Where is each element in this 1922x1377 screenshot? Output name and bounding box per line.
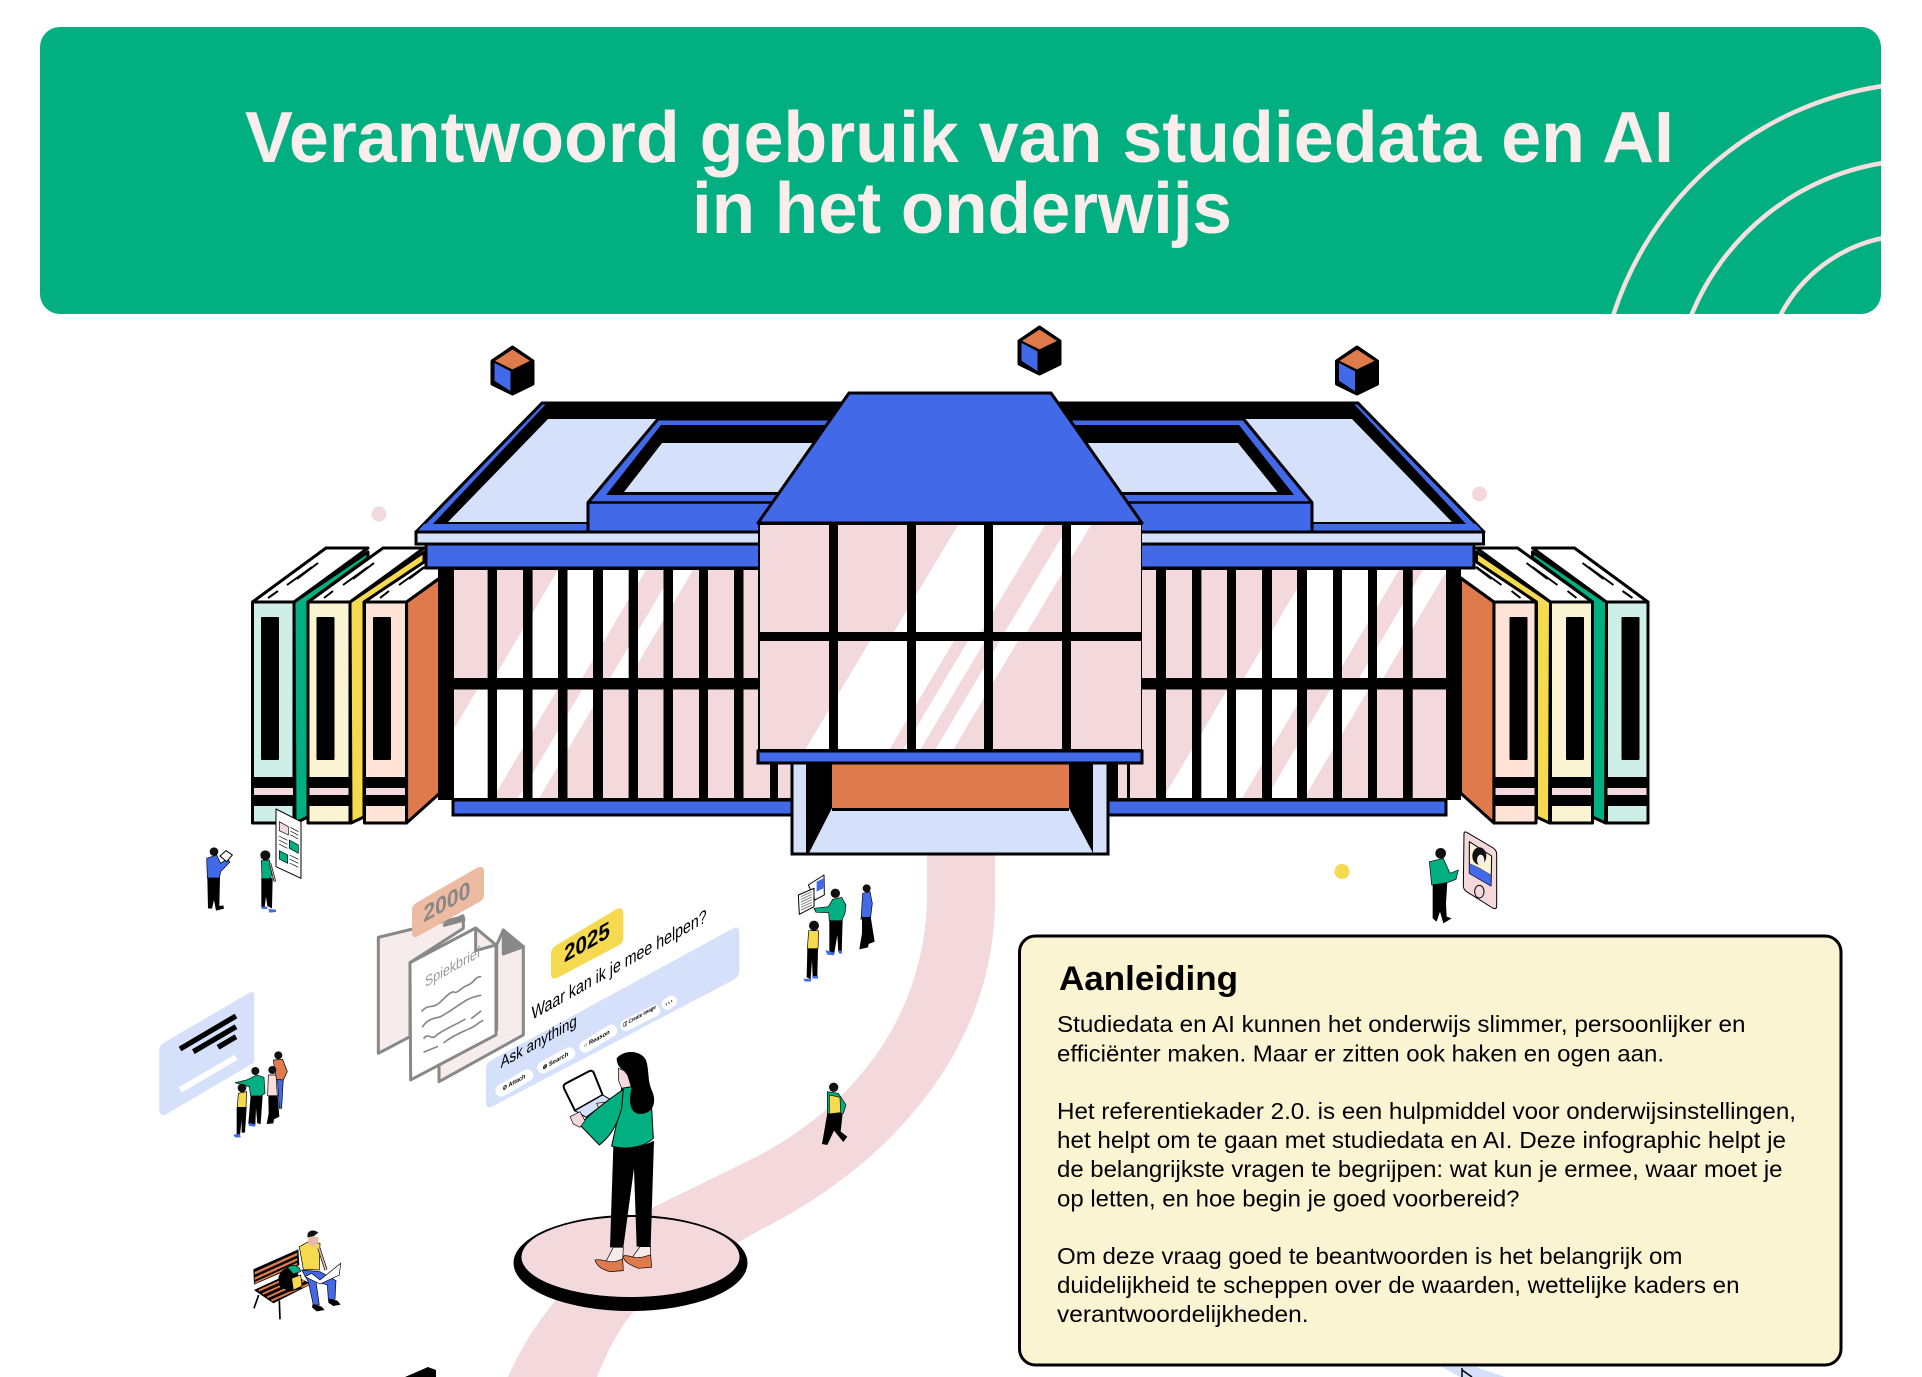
right window wing [1100, 568, 1461, 800]
decorative dot: yellow [1334, 864, 1350, 879]
group with student walking and screens [798, 875, 875, 1145]
path: pink road [508, 850, 995, 1377]
legs [610, 1141, 654, 1247]
torso [612, 1087, 653, 1148]
panel body text: duidelijkheid te scheppen over de waarden, wettelijke kaders en [1057, 1272, 1740, 1298]
panel body text: het helpt om te gaan met studiedata en AI. Deze infographic helpt je [1057, 1127, 1786, 1153]
arm [580, 1089, 623, 1145]
right base [1090, 800, 1446, 815]
header banner [40, 27, 1883, 316]
panel: Aanleiding [1020, 936, 1841, 1365]
books left [252, 548, 481, 823]
panel body text: Om deze vraag goed te beantwoorden is het belangrijk om [1057, 1243, 1682, 1269]
poster [276, 809, 301, 878]
walking student [822, 1083, 847, 1145]
blue card [159, 992, 254, 1115]
cube left [492, 347, 533, 394]
question text: Waar kan ik je mee helpen? [532, 905, 707, 1024]
woman with laptop [564, 1052, 654, 1272]
chip: attach: ⊘ Attach [503, 1073, 525, 1093]
panel body text: Studiedata en AI kunnen het onderwijs slimmer, persoonlijker en [1057, 1011, 1746, 1037]
documents with year labels and AI card [378, 867, 739, 1107]
man at video screen [1429, 832, 1497, 923]
yellow woman [803, 921, 819, 982]
roof: right raised skylight [1040, 419, 1312, 532]
cornice [416, 532, 1484, 544]
green man [814, 889, 846, 955]
woman reading poster [260, 850, 276, 913]
cropped element at bottom right [1442, 1367, 1505, 1377]
title: in het onderwijs [692, 169, 1232, 249]
man [299, 1230, 341, 1311]
pink woman [267, 1066, 279, 1124]
blue man [859, 884, 875, 949]
year label 2025 [551, 908, 623, 978]
chip: create image: ◫ Create image [623, 1004, 656, 1029]
decorative dot: pink left [372, 506, 386, 522]
document title: Spiekbrief [425, 943, 481, 991]
ankles and shoes [595, 1247, 652, 1272]
panel body text: de belangrijkste vragen te begrijpen: wat kun je ermee, waar moet je [1057, 1156, 1782, 1182]
bench [253, 1249, 312, 1319]
backpack [278, 1265, 302, 1292]
chip: reason: ○ Reason [584, 1029, 610, 1050]
orange man [273, 1051, 287, 1108]
prompt text: Ask anything [501, 1011, 577, 1072]
central block [758, 523, 1142, 763]
hair [617, 1052, 654, 1114]
title [245, 98, 1674, 249]
panel body text [1057, 1011, 1796, 1327]
people at poster [207, 809, 301, 913]
green man [235, 1067, 265, 1127]
cube right [1336, 347, 1378, 394]
cropped figure at bottom left [405, 1367, 436, 1377]
books right [1420, 548, 1648, 823]
panel body text: efficiënter maken. Maar er zitten ook haken en ogen aan. [1057, 1040, 1664, 1066]
year label 2000: 2000 [423, 875, 470, 928]
phone [1463, 832, 1497, 909]
chip: more [666, 1001, 672, 1005]
neck [618, 1068, 632, 1088]
panel heading: Aanleiding [1059, 960, 1238, 998]
entrance [792, 762, 1108, 854]
info card with group of people [159, 992, 287, 1137]
year label 2000 [412, 867, 484, 937]
roof: main trapezoid [416, 403, 1484, 532]
chip: search: ⊕ Search [543, 1051, 568, 1072]
hand [570, 1112, 585, 1127]
decorative dot: pink right [1472, 486, 1487, 502]
cube center [1019, 327, 1060, 374]
year label 2025: 2025 [564, 916, 610, 968]
man [1429, 848, 1458, 923]
left base [453, 800, 813, 815]
building [412, 393, 1484, 854]
man on bench [253, 1230, 341, 1319]
laptop [564, 1071, 610, 1122]
AI prompt card [486, 905, 739, 1107]
blue beam [426, 544, 1474, 568]
panel body text: verantwoordelijkheden. [1057, 1301, 1308, 1327]
yellow girl [233, 1084, 247, 1137]
panel body text: op letten, en hoe begin je goed voorbereid? [1057, 1186, 1520, 1212]
screen panels [798, 875, 824, 914]
title: Verantwoord gebruik van studiedata en AI [245, 98, 1674, 178]
central blue roof [758, 393, 1142, 523]
documents [378, 916, 523, 1082]
man with tablet [207, 847, 232, 911]
platform [514, 1215, 748, 1311]
roof: left raised skylight [588, 419, 860, 532]
panel body text: Het referentiekader 2.0. is een hulpmiddel voor onderwijsinstellingen, [1057, 1098, 1796, 1124]
left window wing [438, 570, 790, 800]
